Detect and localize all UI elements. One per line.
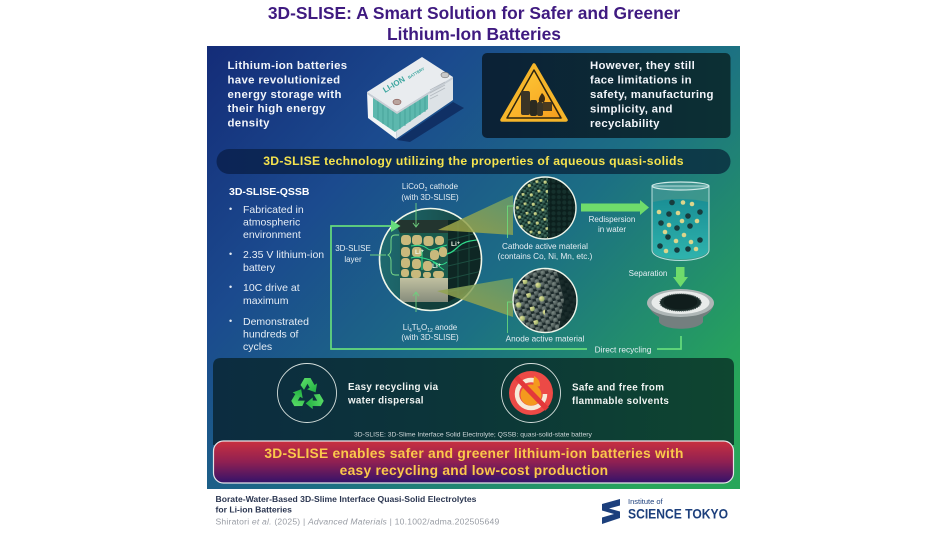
label: anode: Li: [403, 323, 409, 332]
label: cathode: (with 3D-SLISE): [401, 193, 459, 202]
label: direct recycling: Direct recycling: [595, 344, 652, 354]
intro text: lithium-ion batteries: density: [228, 118, 270, 130]
diagram: battery cross-section lens: Li⁺: [432, 263, 442, 270]
label: anode: 12: [427, 328, 433, 334]
banner: conclusion: 3D-SLISE enables safer and greener lithium-ion batteries with: [264, 446, 684, 461]
panel: benefits: [213, 358, 734, 445]
text: safe and free: Safe and free from: [572, 382, 664, 394]
text block: 3D-SLISE-QSSB features: •: [229, 282, 232, 292]
label: cathode active material: Cathode active material: [502, 242, 588, 251]
diagram: battery cross-section lens: Li⁺: [451, 241, 461, 248]
text block: 3D-SLISE-QSSB features: •: [229, 204, 232, 214]
text block: 3D-SLISE-QSSB features: Fabricated in: [243, 204, 304, 216]
banner: conclusion: [214, 441, 734, 483]
limitations text: simplicity, and: [590, 104, 673, 116]
arrow: separation: [673, 267, 688, 287]
main background panel: [207, 46, 740, 489]
intro text: lithium-ion batteries: have revolutionized: [228, 74, 340, 86]
title: 3D-SLISE: A Smart Solution for Safer and Greener: [268, 3, 680, 23]
icon: beaker with particles: [652, 182, 709, 260]
label: cathode active material: (contains Co, Ni, Mn, etc.): [498, 252, 593, 261]
text block: 3D-SLISE-QSSB features: maximum: [243, 295, 289, 307]
label: redispersion in water: in water: [598, 225, 626, 234]
banner: technology heading: [216, 149, 730, 174]
text block: 3D-SLISE-QSSB features: Demonstrated: [243, 316, 309, 328]
citation: for Li-ion Batteries: [216, 504, 292, 514]
icon: recycled powder dish: [647, 289, 714, 329]
banner: conclusion: easy recycling and low-cost production: [340, 463, 608, 478]
intro text: lithium-ion batteries: [228, 60, 348, 130]
arrow: direct recycling loop: [331, 220, 681, 349]
label: anode: (with 3D-SLISE): [401, 333, 459, 342]
text block: 3D-SLISE-QSSB features: 10C drive at: [243, 282, 300, 294]
label: redispersion in water: Redispersion: [589, 215, 635, 224]
title: [268, 3, 680, 44]
label: separation: Separation: [629, 269, 667, 278]
intro text: lithium-ion batteries: energy storage with: [228, 89, 342, 101]
label: cathode: cathode: [427, 182, 459, 191]
label: anode: [401, 323, 459, 342]
logo: Institute of Science Tokyo: Institute of: [628, 497, 664, 506]
icon: li-ion battery: LI-ION: [381, 75, 407, 95]
logo: Institute of Science Tokyo: SCIENCE TOKYO: [628, 506, 728, 522]
diagram: battery cross-section lens: Li⁺: [415, 249, 425, 256]
icon: recycling: [278, 364, 336, 422]
intro text: lithium-ion batteries: their high energy: [228, 103, 326, 115]
banner: technology heading: 3D-SLISE technology utilizing the properties of aqueous quasi-solids: [263, 154, 684, 168]
icon: cathode active material sphere: [514, 177, 576, 239]
limitations text: However, they still: [590, 60, 695, 72]
icon: li-ion battery: BATTERY: [407, 66, 426, 80]
label: cathode: 2: [425, 187, 428, 193]
text block: 3D-SLISE-QSSB features: battery: [243, 262, 276, 274]
leader lines: active materials: [508, 206, 514, 333]
text: easy recycling: water dispersal: [347, 396, 424, 406]
text block: 3D-SLISE-QSSB features: •: [229, 249, 232, 259]
label: anode: O: [421, 323, 427, 332]
text block: 3D-SLISE-QSSB features: [229, 186, 324, 353]
panel: limitations: [482, 53, 730, 138]
label: 3D-SLISE layer: layer: [344, 255, 362, 264]
text block: 3D-SLISE-QSSB features: cycles: [243, 341, 272, 353]
label: anode: 4: [409, 328, 412, 334]
limitations text: [590, 60, 714, 130]
label: anode: Ti: [412, 323, 418, 332]
icon: no flammable solvents: [502, 364, 560, 422]
citation: Borate-Water-Based 3D-Slime Interface Quasi-Solid Electrolytes: [216, 494, 477, 504]
icon: anode active material sphere: [513, 268, 578, 333]
label: anode active material: Anode active material: [506, 334, 585, 344]
text block: 3D-SLISE-QSSB features: hundreds of: [243, 328, 299, 340]
text: easy recycling: Easy recycling via: [348, 382, 439, 393]
cones: magnification: [437, 195, 513, 317]
citation: Shiratori et al. (2025) | Advanced Materials | 10.1002/adma.202505649: [216, 516, 499, 526]
diagram: battery cross-section lens: [370, 203, 490, 312]
label: redispersion in water: [589, 215, 635, 234]
label: cathode: [401, 182, 459, 202]
citation: [216, 494, 499, 526]
label: cathode: LiCoO: [402, 182, 425, 191]
icon: warning triangle: [502, 65, 566, 120]
limitations text: safety, manufacturing: [590, 89, 714, 101]
icon: li-ion battery: [367, 57, 464, 142]
label: anode: anode: [433, 323, 458, 332]
abbreviations note: 3D-SLISE: 3D-Slime Interface Solid Electrolyte; QSSB: quasi-solid-state battery: [354, 432, 592, 438]
label: anode: 5: [418, 328, 421, 334]
text block: 3D-SLISE-QSSB features: 2.35 V lithium-ion: [243, 249, 324, 261]
logo: Institute of Science Tokyo: [602, 497, 728, 524]
limitations text: face limitations in: [590, 74, 692, 86]
intro text: lithium-ion batteries: Lithium-ion batteries: [228, 60, 348, 72]
text block: 3D-SLISE-QSSB features: •: [229, 316, 232, 326]
arrow: redispersion: [581, 200, 649, 215]
text: safe and free: flammable solvents: [572, 396, 669, 407]
text block: 3D-SLISE-QSSB features: 3D-SLISE-QSSB: [229, 186, 310, 198]
text block: 3D-SLISE-QSSB features: environment: [243, 229, 301, 241]
limitations text: recyclability: [590, 118, 660, 130]
label: 3D-SLISE layer: 3D-SLISE: [335, 244, 371, 253]
text: easy recycling: [347, 382, 439, 406]
text block: 3D-SLISE-QSSB features: atmospheric: [243, 216, 300, 228]
label: 3D-SLISE layer: [335, 244, 371, 264]
label: cathode active material: [498, 242, 593, 261]
text: safe and free: [572, 382, 669, 407]
title: Lithium-Ion Batteries: [387, 24, 561, 44]
